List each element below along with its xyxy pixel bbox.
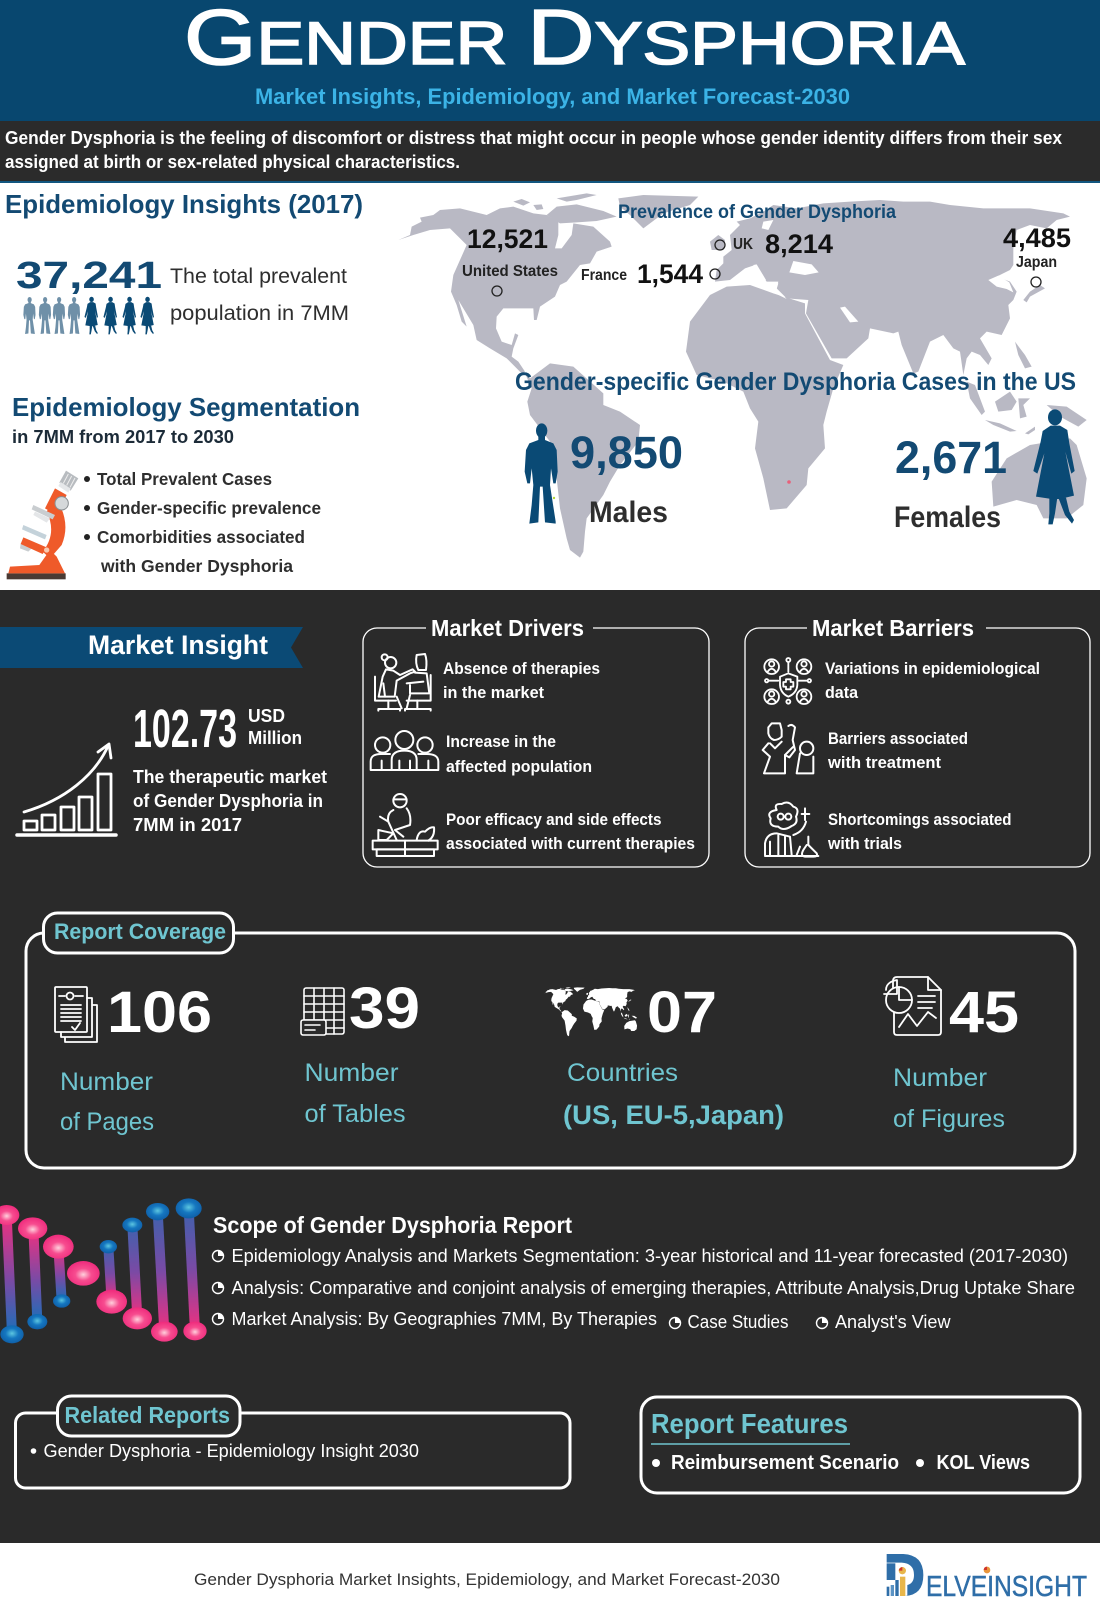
related frame: [16, 1413, 570, 1488]
total prevalent label: population in 7MM: [170, 302, 349, 325]
segmentation list: Total Prevalent Cases: [97, 469, 272, 489]
drivers text: affected population: [446, 758, 592, 776]
icon: population group: [371, 731, 438, 770]
stat: figures: 45: [949, 980, 1019, 1045]
scope heading: Scope of Gender Dysphoria Report: [213, 1212, 572, 1238]
marker: UK: [715, 229, 833, 259]
icon: figures report: [884, 977, 941, 1035]
icon: world: [544, 987, 637, 1036]
female label: Females: [894, 501, 1001, 534]
drivers text: Poor efficacy and side effects: [446, 811, 662, 829]
banner: [0, 627, 303, 668]
icon: female silhouette: [1033, 409, 1075, 524]
barriers text: [825, 660, 1040, 853]
drivers text: [443, 660, 695, 853]
male count: 9,850: [570, 427, 683, 478]
features list: [652, 1452, 1030, 1474]
logo: [887, 1554, 1087, 1602]
stat: countries: [544, 980, 784, 1130]
marker: France: France: [581, 267, 627, 284]
marker: United States: 12,521: [467, 224, 548, 254]
coverage frame: [26, 933, 1075, 1168]
features heading: Report Features: [651, 1408, 848, 1439]
scope list: [212, 1245, 1075, 1332]
drivers text: Absence of therapies: [443, 660, 600, 678]
total prevalent figure: 37,241: [16, 255, 162, 297]
marker: France: 1,544: [637, 259, 703, 289]
icon: doctor and patient: [763, 723, 813, 773]
drivers text: Increase in the: [446, 733, 556, 751]
scope list: Market Analysis: By Geographies 7MM, By Therapies: [232, 1308, 657, 1329]
stat: countries: 07: [647, 980, 717, 1045]
related tab: [58, 1396, 240, 1436]
icon: microscope: [7, 471, 78, 579]
stat: pages: 106: [107, 980, 212, 1045]
barriers text: with trials: [827, 835, 902, 853]
drivers title: Market Drivers: [431, 615, 584, 641]
header band: [0, 0, 1100, 121]
panel: market drivers: [363, 615, 709, 867]
segmentation list: Comorbidities associated: [97, 527, 305, 547]
stat: pages: of Pages: [60, 1108, 154, 1136]
marker: UK: UK: [733, 236, 753, 253]
banner text: Market Insight: [88, 630, 268, 660]
stat: pages: [55, 980, 212, 1136]
world map: [398, 193, 1087, 558]
footer text: Gender Dysphoria Market Insights, Epidemiology, and Market Forecast-2030: [194, 1570, 780, 1589]
stat: figures: [884, 977, 1019, 1133]
drivers text: associated with current therapies: [446, 835, 695, 853]
market description: The therapeutic market: [133, 767, 327, 787]
icon: table: [301, 988, 344, 1035]
marker: France: [581, 259, 720, 289]
drivers frame: [363, 628, 709, 867]
barriers title: Market Barriers: [812, 615, 974, 641]
barriers text: Variations in epidemiological: [825, 660, 1040, 678]
market description: [133, 767, 327, 835]
coverage tab: [44, 913, 234, 953]
total prevalent label: [170, 265, 349, 325]
market unit: Million: [248, 728, 302, 748]
male label: Males: [589, 496, 668, 529]
barriers frame: [745, 628, 1090, 867]
definition band: assigned at birth or sex-related physical characteristics.: [5, 152, 460, 172]
stat: countries: (US, EU-5,Japan): [563, 1100, 784, 1130]
panel: report features: [641, 1397, 1080, 1493]
stat: pages: Number: [60, 1068, 153, 1096]
stat: tables: Number: [304, 1059, 398, 1087]
drivers text: in the market: [443, 684, 544, 702]
panel: report coverage: [26, 913, 1075, 1168]
market value: 102.73: [133, 699, 237, 759]
subtitle: Market Insights, Epidemiology, and Market Forecast-2030: [255, 84, 850, 109]
barriers text: with treatment: [827, 754, 942, 772]
panel: related reports: [16, 1396, 570, 1488]
footer: [0, 1543, 1100, 1602]
scope list: Analyst's View: [835, 1311, 951, 1332]
icon: shield network: [764, 658, 811, 704]
map title: Prevalence of Gender Dysphoria: [618, 202, 896, 223]
heading: epidemiology segmentation: Epidemiology Segmentation: [12, 392, 360, 422]
marker: UK: 8,214: [765, 229, 833, 259]
market description: 7MM in 2017: [133, 815, 242, 835]
scope list: Case Studies: [688, 1311, 788, 1332]
stat: tables: of Tables: [304, 1100, 406, 1128]
segmentation list: Gender-specific prevalence: [97, 498, 321, 518]
segmentation list: [84, 469, 321, 576]
stat: figures: Number: [893, 1064, 987, 1092]
related tab: Related Reports: [64, 1402, 230, 1428]
panel: scope: [0, 1198, 1075, 1343]
marker: Japan: [1003, 223, 1071, 287]
features frame: [641, 1397, 1080, 1493]
stat: countries: Countries: [567, 1059, 678, 1087]
barriers text: Barriers associated: [828, 730, 968, 748]
icon: document: [55, 987, 97, 1042]
barriers text: Shortcomings associated: [828, 811, 1012, 829]
market description: of Gender Dysphoria in: [133, 791, 323, 811]
coverage tab: Report Coverage: [54, 919, 226, 944]
icon: DNA strands: [0, 1198, 207, 1343]
market unit: USD: [248, 706, 285, 726]
related item: Gender Dysphoria - Epidemiology Insight 2030: [44, 1440, 419, 1461]
panel: epidemiology: [0, 183, 1100, 590]
icon: population row: [23, 297, 154, 334]
icon: growth chart: [17, 744, 116, 835]
marker: Japan: Japan: [1016, 254, 1057, 271]
stat: tables: 39: [349, 976, 420, 1041]
scope list: Analysis: Comparative and conjoint analysis of emerging therapies, Attribute Analysis,Drug Uptake Share: [232, 1277, 1075, 1298]
market unit: [248, 706, 302, 748]
barriers text: data: [825, 684, 859, 702]
segmentation subheading: in 7MM from 2017 to 2030: [12, 426, 234, 447]
stat: figures: of Figures: [893, 1105, 1005, 1133]
features list: Reimbursement Scenario: [671, 1452, 899, 1474]
marker: Japan: 4,485: [1003, 223, 1071, 253]
icon: treatment: [373, 794, 438, 856]
icon: researcher: [765, 802, 818, 857]
panel: market insight: [0, 627, 327, 835]
icon: consultation: [375, 654, 431, 711]
features list: KOL Views: [936, 1452, 1030, 1474]
segmentation list: with Gender Dysphoria: [100, 556, 293, 576]
heading: epidemiology insights: Epidemiology Insights (2017): [5, 189, 363, 219]
female count: 2,671: [895, 432, 1007, 483]
panel: market barriers: [745, 615, 1090, 867]
total prevalent label: The total prevalent: [170, 265, 347, 288]
definition band: [0, 121, 1100, 183]
icon: male silhouette: [525, 423, 558, 524]
marker: United States: [462, 224, 558, 296]
marker: United States: United States: [462, 263, 558, 280]
scope list: Epidemiology Analysis and Markets Segmentation: 3-year historical and 11-year forecasted (2017-2030): [232, 1245, 1068, 1266]
stat: tables: [301, 976, 420, 1128]
definition text: Gender Dysphoria is the feeling of discomfort or distress that might occur in people whose gender identity differs from their sex: [5, 128, 1062, 148]
